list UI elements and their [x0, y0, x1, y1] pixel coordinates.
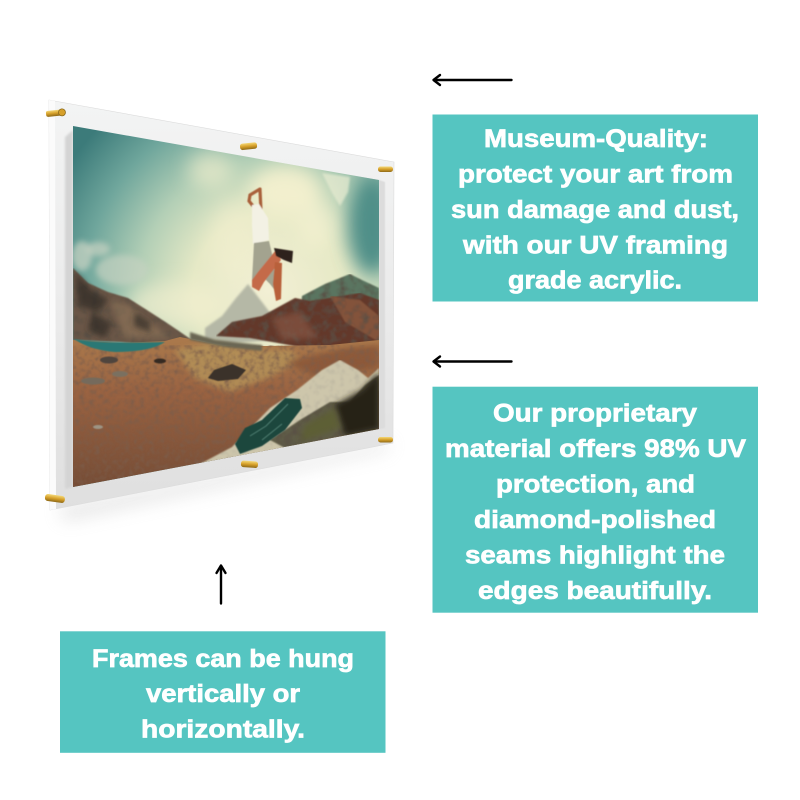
acrylic panel — [49, 100, 394, 510]
standoff: top centre — [240, 142, 257, 150]
panel edge highlight — [49, 100, 56, 510]
valley light patches — [175, 342, 300, 392]
cloud wisp upper right — [322, 173, 350, 206]
text: hanging orientation description: Frames can be hung — [92, 645, 354, 673]
left mountain — [73, 268, 192, 346]
stone wall — [190, 332, 262, 351]
text: museum-quality description: protect your art from — [458, 160, 733, 188]
boulder shadow side — [270, 375, 379, 448]
standoff: top left — [46, 109, 66, 118]
panel: museum-quality — [432, 114, 758, 302]
lake — [74, 339, 165, 352]
panel: hanging orientation — [60, 631, 386, 753]
arrow: pointing up to frame — [216, 566, 226, 604]
sky — [73, 120, 383, 490]
text: museum-quality description — [451, 125, 739, 294]
standoff: bottom right — [378, 437, 393, 442]
standoff: top right — [378, 166, 393, 172]
shirt — [252, 204, 269, 244]
boulder light top — [198, 360, 379, 470]
clouds — [127, 152, 333, 327]
text: UV protection description: protection, and — [496, 470, 695, 498]
print shadow on panel — [65, 130, 73, 489]
arms — [249, 189, 261, 211]
shorts — [252, 240, 275, 289]
text: UV protection description: seams highlight the — [465, 542, 725, 570]
panel: UV protection — [432, 387, 758, 613]
text: hanging orientation description — [92, 645, 354, 744]
arrow: pointing left to edge seam — [434, 356, 512, 366]
right panel strip — [379, 180, 385, 429]
text: museum-quality description: sun damage and dust, — [451, 196, 739, 224]
wall shadow — [60, 442, 392, 520]
text: hanging orientation description: vertically or — [146, 680, 300, 708]
text: UV protection description: Our proprietary — [493, 400, 697, 428]
green hill — [300, 274, 379, 325]
text: UV protection description — [445, 400, 746, 605]
jumping person — [249, 189, 293, 301]
photograph — [72, 120, 396, 492]
text: museum-quality description: with our UV framing — [462, 232, 728, 260]
standoff: bottom left — [45, 494, 65, 503]
rocks — [81, 356, 246, 429]
thigh and knee — [252, 250, 281, 291]
text: hanging orientation description: horizontally. — [141, 716, 305, 744]
valley ground — [73, 337, 379, 492]
lower leg — [273, 262, 282, 301]
framed photo on acrylic panel — [45, 100, 396, 520]
upper right teal sky — [348, 175, 396, 275]
standoff: bottom centre — [241, 460, 258, 468]
shoes — [274, 248, 293, 263]
text: museum-quality description: grade acrylic. — [508, 266, 682, 294]
red-brown ridge — [216, 293, 379, 347]
text: museum-quality description: Museum-Quality: — [484, 125, 708, 153]
green jacket — [235, 398, 302, 454]
ground texture — [73, 345, 379, 490]
distant mountain — [204, 284, 270, 343]
arrow: pointing left to top edge — [434, 75, 512, 85]
left clouds — [72, 241, 148, 285]
text: UV protection description: diamond-polished — [474, 506, 716, 534]
text: UV protection description: material offers 98% UV — [445, 435, 746, 463]
text: UV protection description: edges beautifully. — [478, 577, 712, 605]
